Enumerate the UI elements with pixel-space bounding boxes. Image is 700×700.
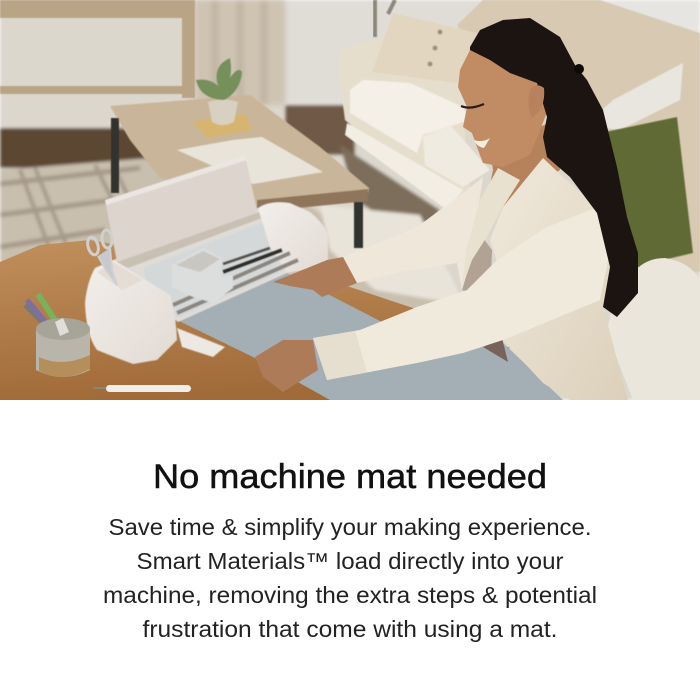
near hand (255, 340, 318, 392)
carriage (172, 248, 233, 303)
green throw blanket (605, 117, 693, 272)
plant (196, 58, 242, 125)
far hand (273, 257, 357, 297)
coffee table (110, 95, 369, 248)
machine lid (105, 155, 258, 262)
body text (103, 514, 597, 642)
machine base (113, 208, 328, 322)
hair (470, 18, 638, 317)
cutting machine (85, 155, 328, 364)
hair tie (574, 64, 584, 74)
rails (223, 250, 282, 272)
floor lamp stand (375, 0, 395, 37)
ear (528, 85, 544, 118)
heading: No machine mat needed (153, 458, 547, 496)
feed tray (177, 328, 225, 357)
machine throat (143, 222, 290, 318)
wooden shelf frame (0, 0, 195, 98)
body text: Smart Materials™ load directly into your (136, 548, 564, 574)
right tower (258, 202, 328, 273)
white chair (607, 258, 700, 400)
pen cup with markers (25, 294, 90, 377)
undershirt (462, 238, 492, 300)
left tower (85, 260, 177, 364)
desk table (0, 240, 510, 400)
room background (0, 0, 700, 400)
scissors (86, 230, 117, 285)
body text: Save time & simplify your making experience. (108, 514, 592, 540)
photo: woman using cutting machine at a table (0, 0, 700, 400)
near sleeve (313, 207, 610, 380)
smile (474, 138, 490, 148)
eye (461, 104, 484, 108)
weeding tool (93, 385, 191, 392)
sofa (338, 0, 700, 272)
collar front (462, 168, 520, 288)
grey material sheet (177, 272, 563, 400)
face (458, 50, 548, 167)
far sleeve (343, 177, 483, 290)
curtain (195, 0, 285, 105)
woman (255, 18, 638, 400)
body text: machine, removing the extra steps & potential (103, 582, 597, 608)
body text: frustration that come with using a mat. (142, 616, 558, 642)
neck and chest (480, 120, 560, 242)
torso (490, 158, 628, 400)
